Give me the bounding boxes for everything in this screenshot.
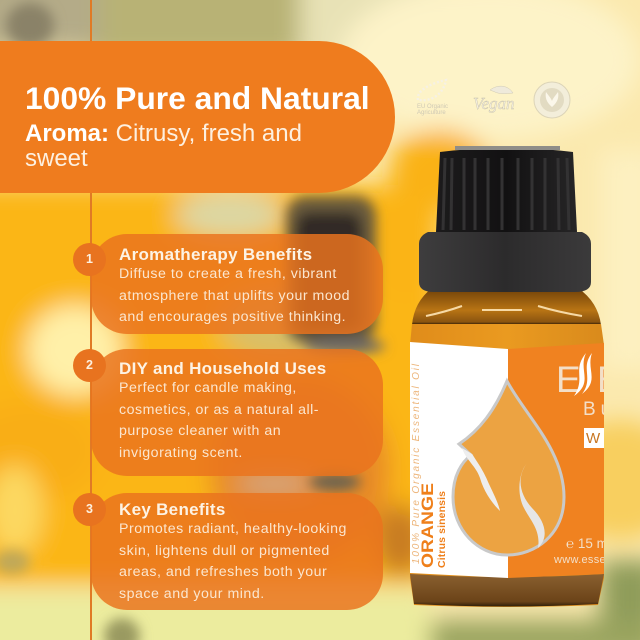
icon: vegan: Vegan xyxy=(473,94,515,113)
number badge 3 xyxy=(73,493,106,526)
icon: cruelty free rabbit xyxy=(534,82,570,118)
cap collar xyxy=(419,232,591,292)
body text: areas, and refreshes both your xyxy=(119,564,327,580)
body text: purpose cleaner with an xyxy=(119,423,281,439)
body text: and encourages positive thinking. xyxy=(119,309,346,325)
body text: invigorating scent. xyxy=(119,445,243,461)
label: brand text: E xyxy=(597,359,622,400)
glass body xyxy=(410,324,604,607)
number badge 2 xyxy=(73,349,106,382)
cap xyxy=(419,146,591,292)
label: brand text: Bu xyxy=(583,399,616,420)
icon: EU organic leaf xyxy=(417,80,448,116)
aroma text: Aroma: Citrusy, fresh and xyxy=(25,120,302,147)
body text: atmosphere that uplifts your mood xyxy=(119,288,350,304)
panel: key benefits xyxy=(91,493,383,610)
vertical timeline line xyxy=(90,0,92,640)
bottle xyxy=(410,146,604,607)
header panel xyxy=(0,41,395,193)
number badge 3: 3 xyxy=(86,502,93,516)
icon: EU organic leaf: Agriculture xyxy=(417,110,446,116)
label: brand text xyxy=(554,353,604,563)
label: orange panel xyxy=(508,343,604,578)
body text xyxy=(119,266,350,325)
bottle base shadow xyxy=(410,574,604,606)
glass shoulder and neck xyxy=(412,288,601,325)
label: side text: ORANGE xyxy=(418,483,437,568)
shoulder highlights xyxy=(426,306,582,316)
aroma text xyxy=(25,120,302,172)
drop logo xyxy=(453,381,564,555)
body text: Promotes radiant, healthy-looking xyxy=(119,521,347,537)
icon: EU organic leaf: EU Organic xyxy=(417,104,448,110)
body text: Perfect for candle making, xyxy=(119,380,297,396)
body text: cosmetics, or as a natural all- xyxy=(119,402,319,418)
aroma text: sweet xyxy=(25,145,88,172)
panel: DIY and household uses xyxy=(91,349,383,476)
label: side text: 100% Pure Organic Essential Oil xyxy=(411,363,422,564)
panel: aromatherapy benefits xyxy=(91,234,383,334)
number badge 1 xyxy=(73,243,106,276)
label: side text: Citrus sinensis xyxy=(436,491,448,568)
number badge 1: 1 xyxy=(86,252,93,266)
heading: Key Benefits xyxy=(119,500,226,519)
label: white panel xyxy=(410,342,508,578)
body text: skin, lightens dull or pigmented xyxy=(119,543,330,559)
label: brand text: E xyxy=(556,359,581,400)
label: brand text: www.esse xyxy=(553,554,606,566)
body text: Diffuse to create a fresh, vibrant xyxy=(119,266,337,282)
body text xyxy=(119,380,319,461)
number badge 2: 2 xyxy=(86,358,93,372)
label: brand text: W xyxy=(586,430,601,447)
certification icons xyxy=(416,78,570,118)
body text: space and your mind. xyxy=(119,586,265,602)
label: brand text: ℮ 15 m xyxy=(566,536,608,551)
heading: 100% Pure and Natural xyxy=(25,80,370,116)
label: side text xyxy=(411,363,448,568)
heading: DIY and Household Uses xyxy=(119,359,326,378)
heading: Aromatherapy Benefits xyxy=(119,245,312,264)
body text xyxy=(119,521,347,602)
